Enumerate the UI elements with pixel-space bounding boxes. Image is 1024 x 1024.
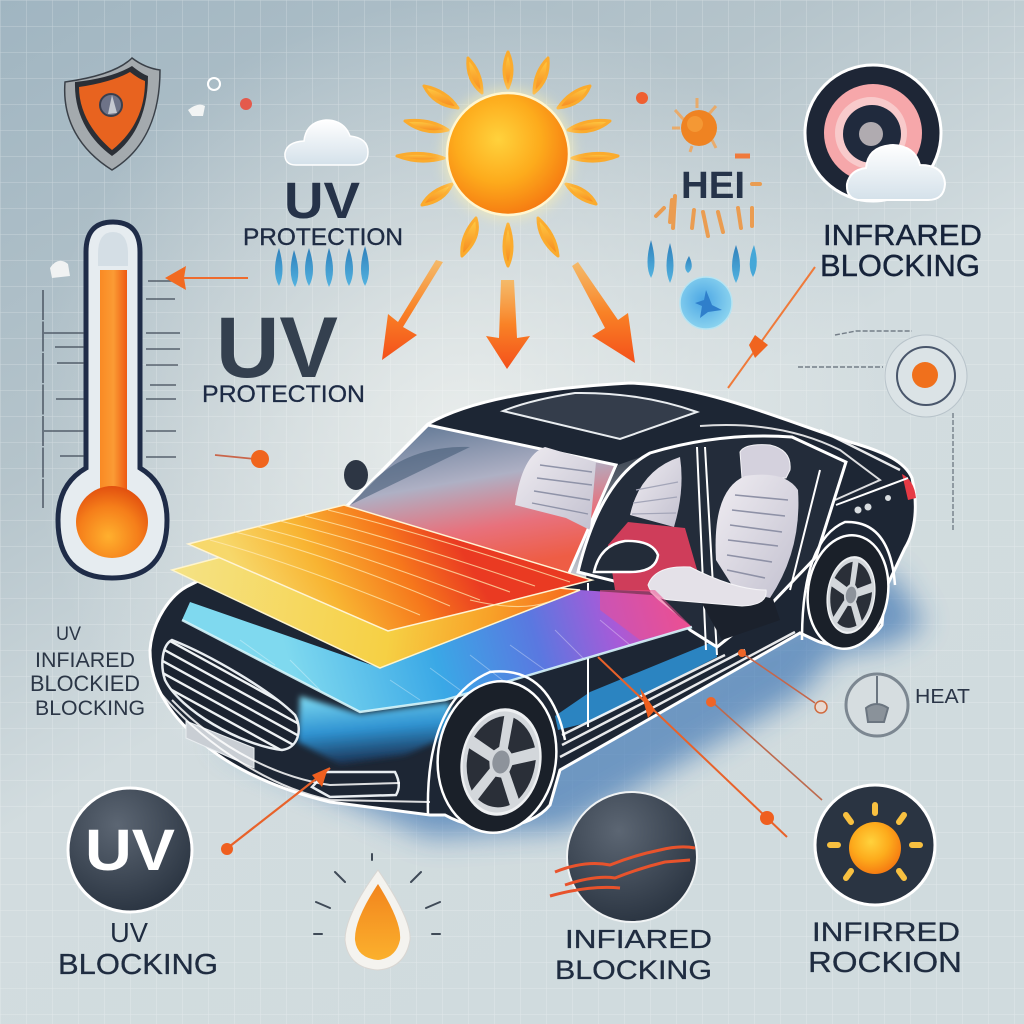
taillight [902,474,916,500]
grille [161,638,300,752]
icon: heat dial [846,674,908,736]
label: UV blocking: BLOCKING [58,949,218,981]
blue door lower panel [555,640,717,730]
heading: infrared blocking top right [820,220,982,283]
icon: shield [65,58,160,170]
heading: infrared blocking top right: INFRARED [823,220,982,252]
rear seat through door [630,457,682,527]
lower intake [312,772,399,797]
heading: UV protection upper: UV [284,172,360,229]
blue film layer [182,590,692,712]
icon: dark circle with infrared waves [550,792,697,922]
label: infrared blocking center bottom: INFIARED [565,924,712,954]
pointer lines at car bottom [221,649,827,855]
front wheel [428,671,566,840]
car body [150,383,915,827]
heading: HEAT sun label: HEI [681,165,745,207]
label: UV blocking: UV [110,917,148,948]
orange film layer [188,505,592,631]
icon: infrared circle with cloud [805,65,945,201]
heading: UV protection lower: PROTECTION [202,381,365,408]
arrow: infrared pointer [728,267,815,388]
yellow film layer [172,556,580,668]
icon: thermometer [43,222,180,578]
heading: UV protection upper [243,172,403,251]
marker: orange dot [215,450,269,468]
icon: heat drops and ball [648,240,757,329]
label: UV blocking [58,917,218,981]
label: left UV infrared blocking: BLOCKIED [30,671,140,696]
icon: orange drop [314,854,440,970]
icon: sun badge [815,785,935,905]
rear wheel [800,522,896,654]
label: heat: HEAT [915,686,970,708]
heading: UV protection lower [202,300,365,408]
rear seat through windshield [515,447,596,530]
heading: UV protection upper: PROTECTION [243,224,403,251]
label: infrared rockion: INFIRRED [812,917,960,947]
heading: infrared blocking top right: BLOCKING [820,248,980,283]
heading: HEAT sun label [656,165,760,236]
icon: target circle [798,331,967,530]
door opening interior [578,436,846,647]
arrows from sun [382,260,635,369]
windshield [345,425,616,580]
number plate [186,721,254,768]
icon: UV badge: UV [85,818,175,883]
car shadow [205,570,925,838]
front seat [648,445,798,640]
heading: UV protection lower: UV [216,300,338,396]
blue hood glow [298,696,450,764]
label: left UV infrared blocking: UV [56,624,81,645]
label: left UV infrared blocking [30,624,145,720]
label: infrared blocking center bottom [555,924,712,985]
icon: blue rain drops [275,246,369,287]
arrow to thermometer [165,266,248,290]
door pillars [588,447,820,727]
mirror left [344,460,368,490]
sunroof [503,393,697,439]
icon: UV badge [68,788,192,912]
small floating marks [188,78,648,116]
label: infrared blocking center bottom: BLOCKING [555,955,712,985]
body contour lines [158,690,430,802]
label: infrared rockion: ROCKION [808,947,962,979]
label: left UV infrared blocking: BLOCKING [35,697,145,720]
car illustration [150,383,916,840]
label: left UV infrared blocking: INFIARED [35,649,135,672]
label: infrared rockion [808,917,962,979]
icon: sun [397,52,618,266]
A pillar [566,452,655,578]
icon: small heat sun [672,98,750,156]
side mirror [594,541,658,572]
icon: cloud [285,120,368,165]
